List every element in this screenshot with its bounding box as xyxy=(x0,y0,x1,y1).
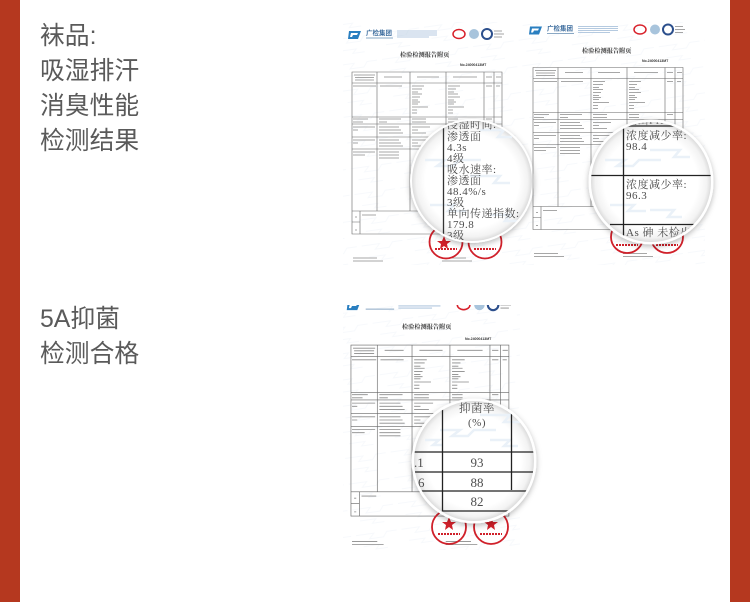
magnifier 3: 6 xyxy=(418,475,425,490)
magnifier 3: 82 xyxy=(470,494,484,509)
report 3 header logos xyxy=(346,305,511,312)
report 2 table xyxy=(533,68,683,256)
right red band xyxy=(730,0,750,602)
report 2 header logos: 广检集团 xyxy=(547,24,574,32)
report 1 title: 检验检测报告附页 xyxy=(400,51,450,59)
report 2 header logos xyxy=(529,24,685,34)
report 2 stamps xyxy=(611,221,683,253)
magnifier 1: 4级 xyxy=(447,152,464,165)
report 1 table xyxy=(352,72,502,261)
heading: 5A antibacterial: 检测合格 xyxy=(40,341,139,368)
magnifier 2: 96.3 xyxy=(626,190,647,202)
magnifier 2 xyxy=(588,113,714,245)
report 1 stamps xyxy=(430,226,502,258)
magnifier 2: 浓度减少率: xyxy=(626,128,687,142)
heading: socks moisture and odor results: 消臭性能 xyxy=(40,93,139,120)
magnifier 2: 98.4 xyxy=(626,141,647,153)
magnifier 1: 4.3s xyxy=(447,142,467,154)
heading: socks moisture and odor results xyxy=(40,22,139,155)
report page 2 xyxy=(529,24,714,256)
watermark paper: report 3 xyxy=(343,305,520,550)
magnifier 2: 浓度减少率: xyxy=(626,177,687,191)
magnifier 3: 抑菌率 xyxy=(459,401,495,415)
magnifier 1: 浸湿时间: xyxy=(447,117,497,131)
magnifier 1: 吸水速率: xyxy=(447,162,497,176)
report 2 number: No.24000413MT xyxy=(642,59,669,63)
heading: socks moisture and odor results: 吸湿排汗 xyxy=(40,58,139,85)
magnifier 2: As 砷 未检出 xyxy=(626,225,692,239)
watermark paper: reports 1 and 2 xyxy=(343,22,705,265)
heading: 5A antibacterial xyxy=(40,306,139,368)
magnifier 1: 渗透面 xyxy=(447,173,482,187)
magnifier 3: 93 xyxy=(470,455,484,470)
magnifier 3: 88 xyxy=(470,475,484,490)
report page 3 xyxy=(347,300,536,545)
report 3 title: 检验检测报告附页 xyxy=(402,323,452,331)
magnifier 1 xyxy=(410,115,534,245)
magnifier 2: 生山PH%· xyxy=(626,113,678,127)
magnifier 1: 3级 xyxy=(447,229,464,242)
report 3 table xyxy=(351,345,509,545)
magnifier 1: 3级 xyxy=(447,196,464,209)
report 3 stamps xyxy=(432,510,508,544)
magnifier 3 xyxy=(412,395,536,524)
magnifier 3: .1 xyxy=(414,455,424,470)
report 3 number: No.24000413MT xyxy=(465,337,492,341)
report 1 header logos: 广检集团 xyxy=(366,28,392,37)
magnifier 1: 单向传递指数: xyxy=(447,206,520,220)
magnifier 1: 179.8 xyxy=(447,219,474,231)
heading: socks moisture and odor results: 检测结果 xyxy=(40,128,139,155)
left red band xyxy=(0,0,20,602)
report 1 header logos xyxy=(348,28,504,39)
report page 1 xyxy=(348,28,534,261)
report graphics xyxy=(346,24,716,545)
report 1 number: No.24000413MT xyxy=(460,63,487,67)
magnifier 1: 48.4%/s xyxy=(447,186,486,198)
magnifier 3: (%) xyxy=(468,417,486,429)
magnifier 1: 渗透面 xyxy=(447,129,482,143)
heading: 5A antibacterial: 5A抑菌 xyxy=(40,306,120,333)
heading: socks moisture and odor results: 袜品: xyxy=(40,23,96,50)
report 2 title: 检验检测报告附页 xyxy=(582,47,632,55)
